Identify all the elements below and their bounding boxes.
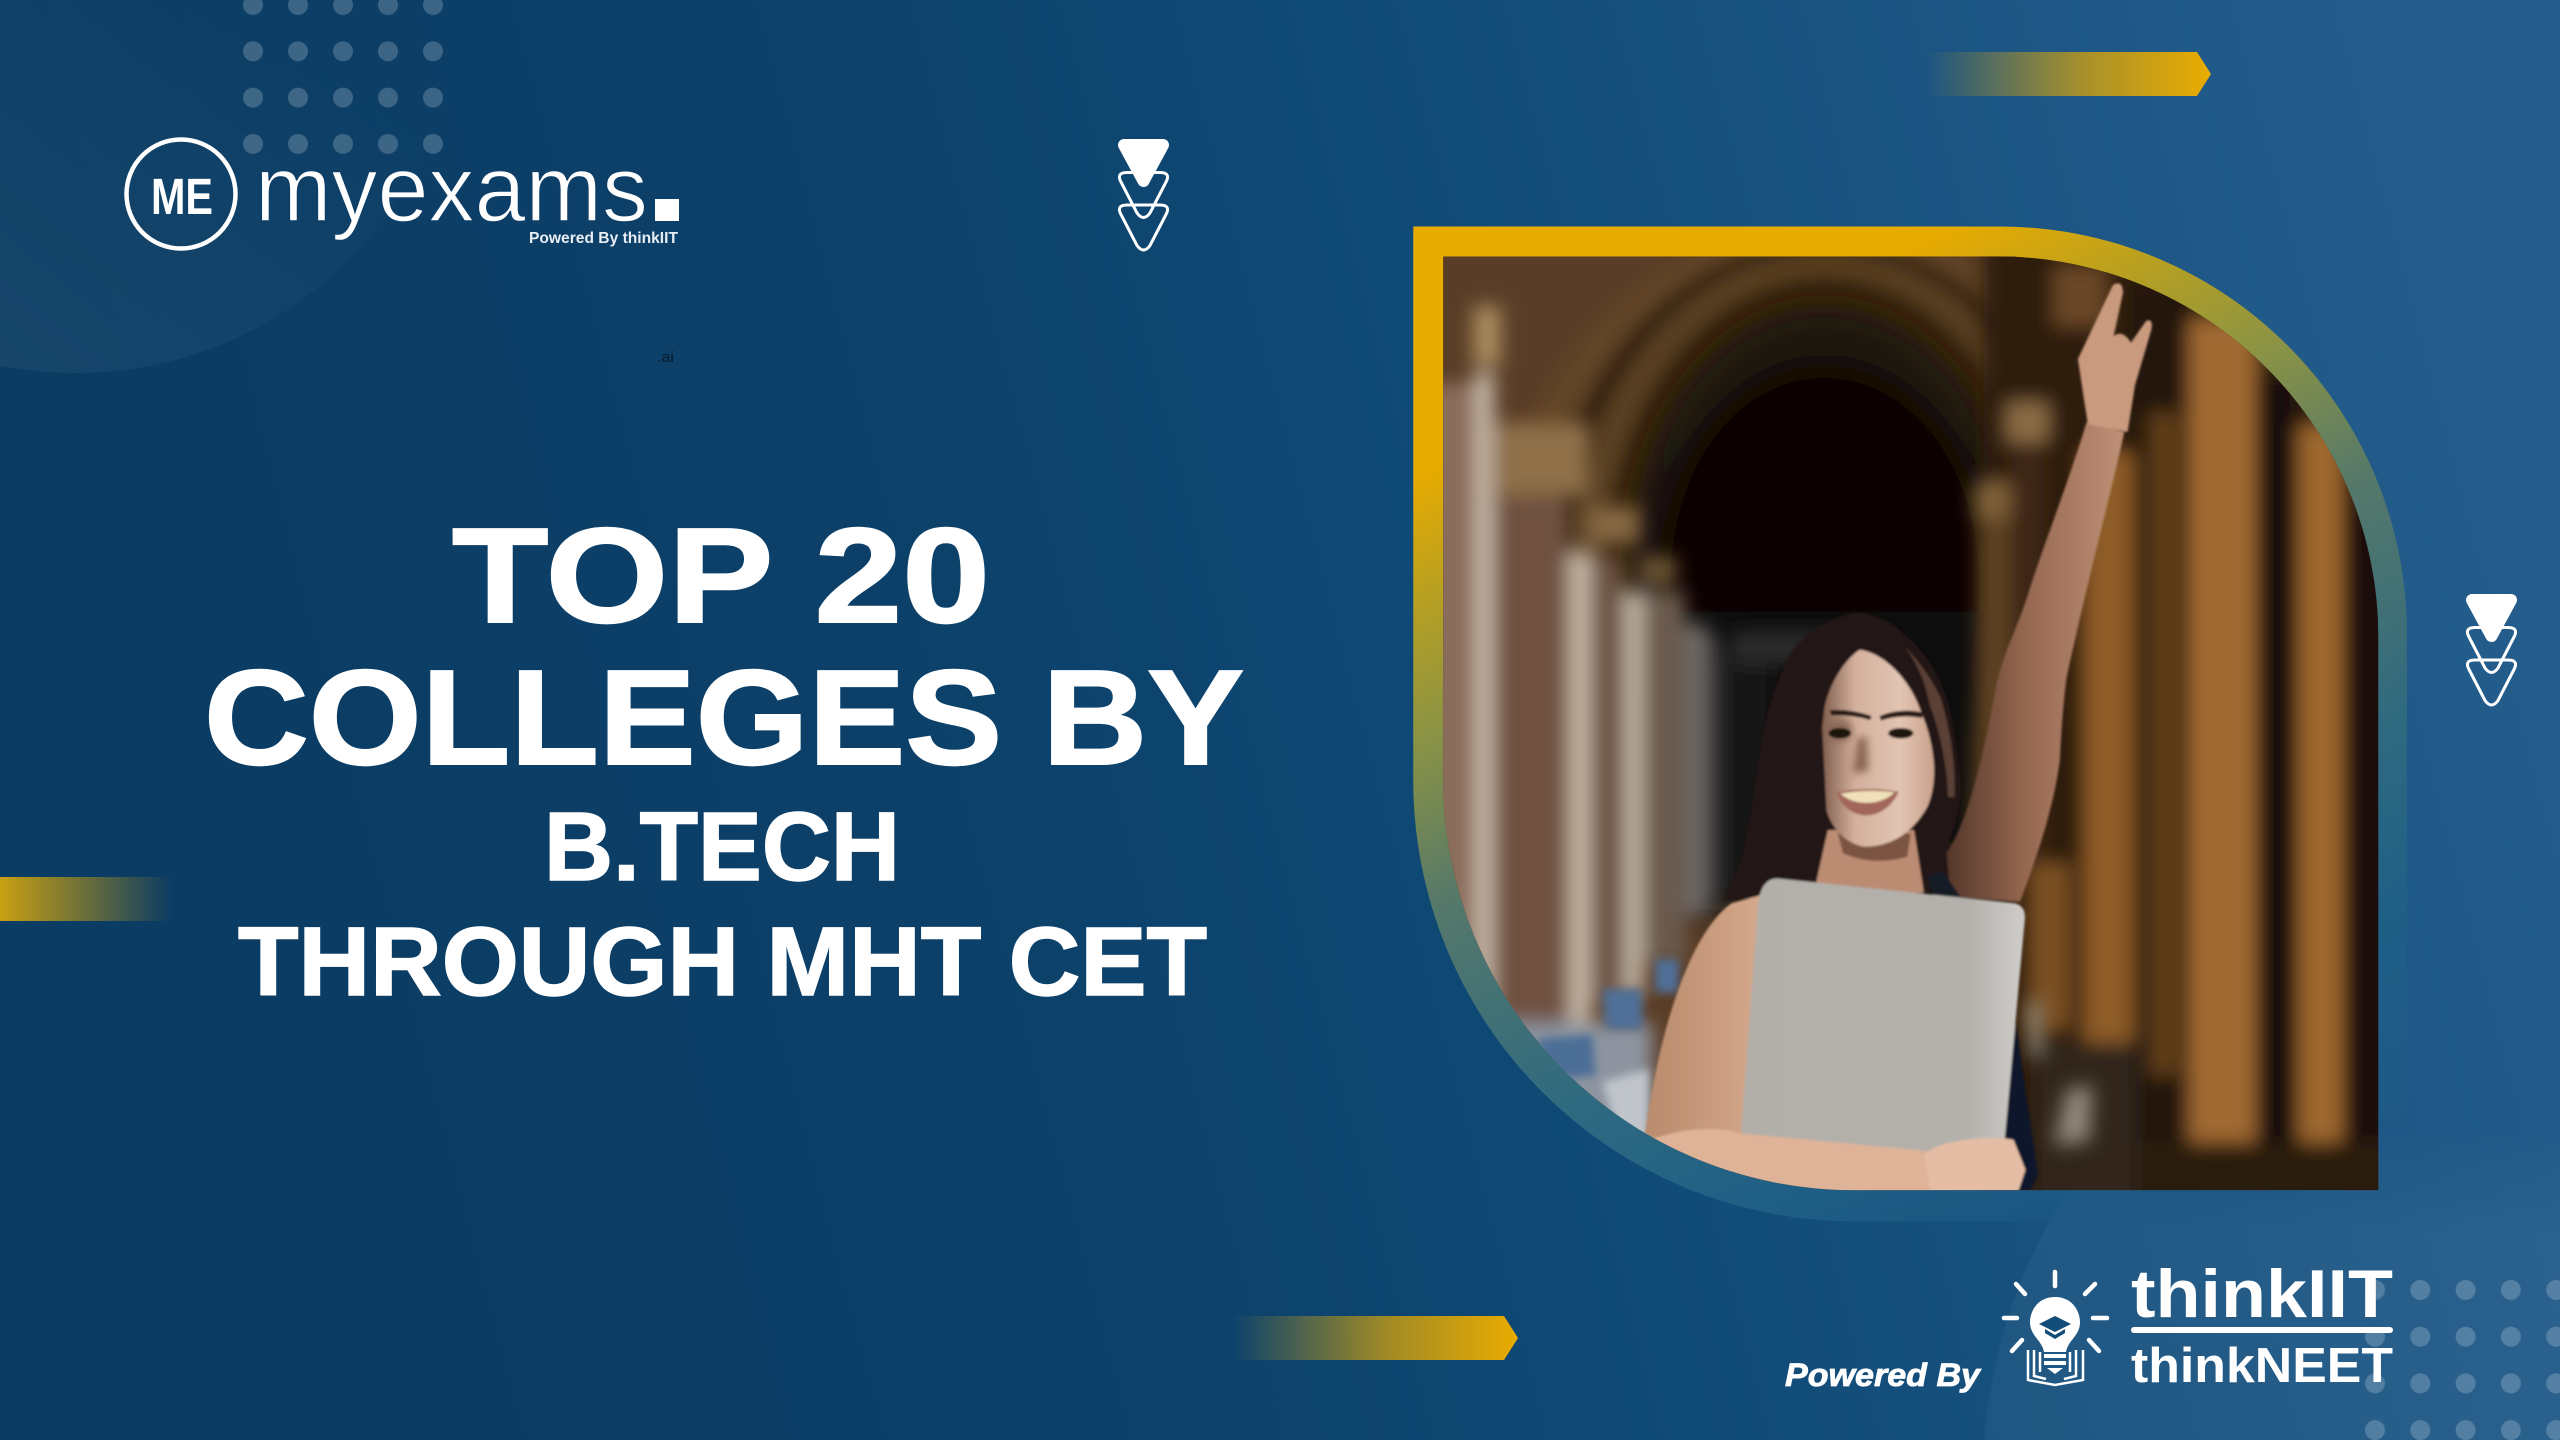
background circle: bottom right — [1984, 943, 2560, 1440]
myexams logo — [126, 136, 679, 248]
gold accent bar: left — [0, 877, 172, 921]
eye-socket shading — [1826, 720, 1868, 774]
hair fringe — [1805, 615, 1931, 837]
laptop — [1740, 879, 2025, 1152]
photo panel with gradient frame — [1413, 227, 2407, 1221]
wordmark divider — [2131, 1327, 2393, 1333]
logo wordmark: myexams — [255, 136, 648, 241]
raised arm — [1947, 422, 2124, 902]
wordmark: thinkIIT: thinkIIT — [2131, 1256, 2393, 1332]
corridor arches — [1443, 256, 2010, 1190]
forearm — [1644, 1129, 1951, 1195]
hair back — [1723, 613, 1970, 900]
bulb rays — [2004, 1272, 2107, 1351]
thinkIIT thinkNEET logo — [2004, 1256, 2393, 1393]
logo square dot — [655, 199, 679, 221]
open book — [2028, 1350, 2083, 1385]
photo: student in a college corridor — [1420, 227, 2402, 1215]
dot grid: bottom right — [2352, 1267, 2560, 1440]
blurred object at right floor — [2027, 999, 2093, 1145]
student figure — [1644, 283, 2152, 1195]
logo mark: circle with ME — [126, 140, 236, 248]
neck — [1815, 830, 1924, 893]
title line: B.TECH: B.TECH — [544, 792, 900, 901]
face — [1821, 650, 1934, 847]
lower hand — [1924, 1138, 2025, 1192]
raised hand — [2078, 283, 2152, 432]
eyebrows and eyes — [1828, 710, 1923, 739]
wordmark: thinkNEET: thinkNEET — [2131, 1339, 2393, 1393]
graduation cap — [2039, 1316, 2071, 1339]
gold accent bar: bottom — [1233, 1316, 1518, 1360]
icon: stacked triangles, top — [1119, 145, 1168, 250]
gradient frame — [1413, 227, 2407, 1221]
title line: TOP 20: TOP 20 — [452, 500, 990, 651]
left shoulder and arm — [1644, 893, 1768, 1142]
mouth — [1836, 789, 1899, 816]
right columns — [1984, 233, 2402, 1215]
dress — [2000, 996, 2038, 1190]
title line: THROUGH MHT CET: THROUGH MHT CET — [238, 907, 1207, 1016]
left floor — [1514, 1008, 1664, 1138]
title — [204, 500, 1244, 1016]
under-chin shadow — [1838, 833, 1911, 861]
left capitals — [1473, 306, 1501, 366]
logo mark: circle with ME: ME — [151, 168, 213, 225]
logo tagline: Powered By thinkIIT — [529, 230, 679, 247]
bulb base — [2044, 1354, 2066, 1374]
hair highlight — [1906, 649, 1956, 798]
corridor floor tiles — [1536, 959, 1679, 1148]
powered-by line: Powered By — [1785, 1357, 1982, 1393]
bulb — [2030, 1297, 2080, 1352]
corridor columns — [1420, 233, 2402, 1215]
background circle: top left — [0, 0, 462, 373]
left columns — [1420, 383, 1474, 1066]
gold accent bar: top — [1927, 52, 2211, 96]
title line: COLLEGES BY: COLLEGES BY — [204, 642, 1244, 793]
dot grid: top — [230, 0, 456, 167]
stray text .ai: .ai — [657, 349, 674, 366]
icon: light bulb with graduation cap and book — [2004, 1272, 2107, 1385]
icon: stacked triangles, right — [2467, 600, 2516, 705]
dress strap — [1927, 871, 1960, 896]
corridor tunnel darkness — [1629, 306, 2020, 910]
